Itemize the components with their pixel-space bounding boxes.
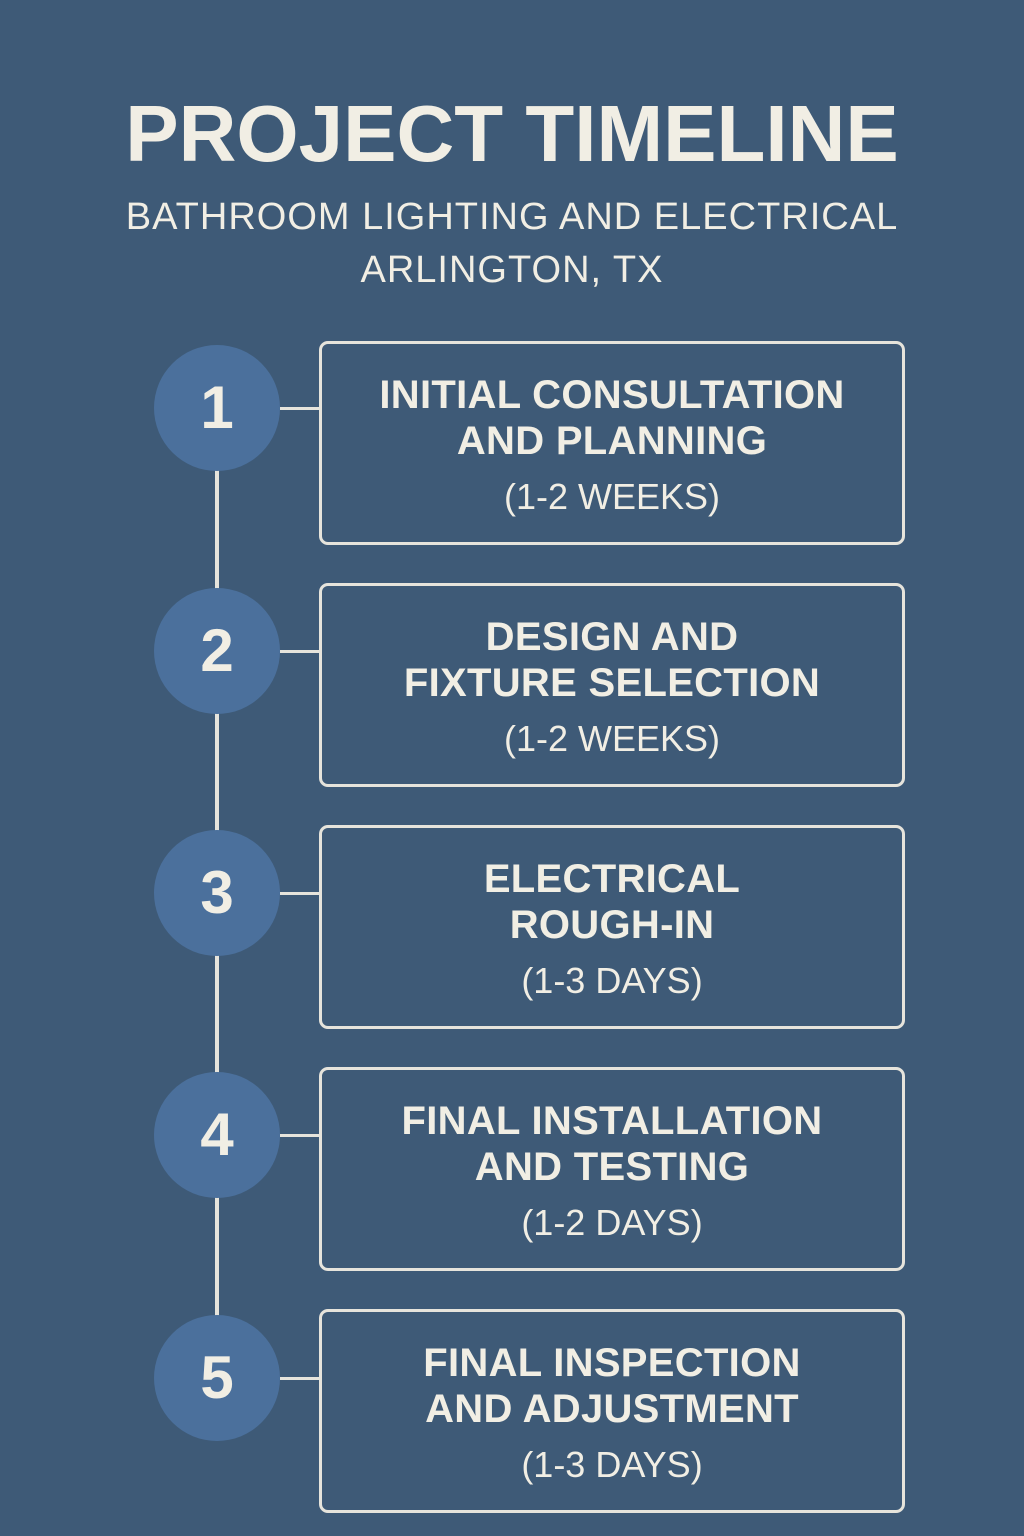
box 1: INITIAL CONSULTATION bbox=[379, 373, 845, 417]
box 4: AND TESTING bbox=[475, 1145, 749, 1189]
subtitle bbox=[126, 196, 898, 291]
box 1: AND PLANNING bbox=[457, 419, 767, 463]
circle 4 bbox=[154, 1072, 280, 1198]
box 4: (1-2 DAYS) bbox=[521, 1202, 703, 1243]
box 5: (1-3 DAYS) bbox=[521, 1444, 703, 1485]
circle 5: 5 bbox=[200, 1344, 234, 1411]
circle 3 bbox=[154, 830, 280, 956]
timeline line bbox=[215, 408, 219, 1378]
box 2 bbox=[319, 583, 905, 787]
circle 3: 3 bbox=[200, 859, 234, 926]
subtitle: BATHROOM LIGHTING AND ELECTRICAL bbox=[126, 196, 898, 238]
box 3 bbox=[319, 825, 905, 1029]
circle 4: 4 bbox=[200, 1101, 234, 1168]
box 3: ROUGH-IN bbox=[510, 903, 714, 947]
box 2: (1-2 WEEKS) bbox=[504, 718, 720, 759]
box 5: FINAL INSPECTION bbox=[423, 1341, 801, 1385]
box 2: FIXTURE SELECTION bbox=[404, 661, 820, 705]
box 2: DESIGN AND bbox=[486, 615, 738, 659]
circle 1 bbox=[154, 345, 280, 471]
box 1: (1-2 WEEKS) bbox=[504, 476, 720, 517]
circle 5 bbox=[154, 1315, 280, 1441]
circle 2 bbox=[154, 588, 280, 714]
box 1 bbox=[319, 341, 905, 545]
circle 2: 2 bbox=[200, 617, 234, 684]
box 3: (1-3 DAYS) bbox=[521, 960, 703, 1001]
circle 1: 1 bbox=[200, 374, 234, 441]
box 3: ELECTRICAL bbox=[484, 857, 740, 901]
subtitle: ARLINGTON, TX bbox=[360, 249, 664, 291]
connector 2 bbox=[280, 650, 319, 653]
box 5: AND ADJUSTMENT bbox=[425, 1387, 799, 1431]
box 4 bbox=[319, 1067, 905, 1271]
box 4: FINAL INSTALLATION bbox=[402, 1099, 822, 1143]
box 5 bbox=[319, 1309, 905, 1513]
title: PROJECT TIMELINE bbox=[125, 89, 899, 178]
connector 4 bbox=[280, 1134, 319, 1137]
connector 5 bbox=[280, 1377, 319, 1380]
connector 3 bbox=[280, 892, 319, 895]
connector 1 bbox=[280, 407, 319, 410]
